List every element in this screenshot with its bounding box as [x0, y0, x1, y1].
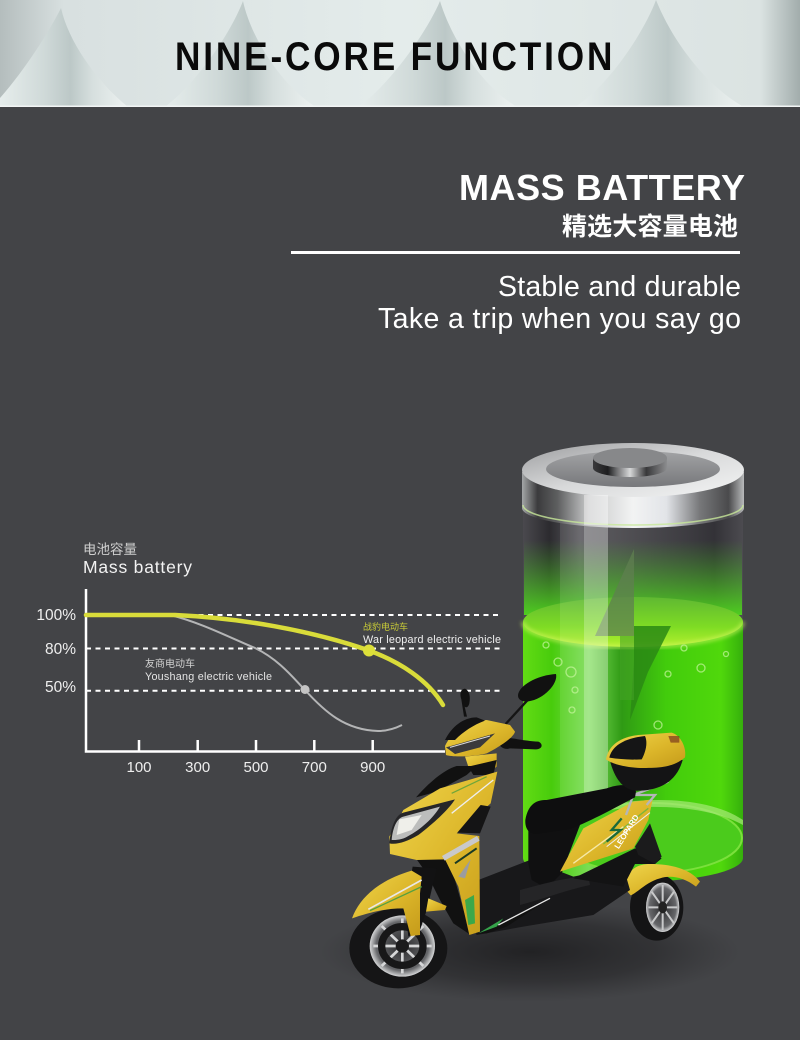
rear rack: [626, 782, 668, 815]
x axis labels: 900: [360, 759, 385, 776]
x axis labels: 100: [126, 759, 152, 776]
chart title: [83, 541, 192, 577]
tagline text: Take a trip when you say go: [378, 303, 741, 335]
header banner with tents: [0, 0, 800, 107]
rear lower black: [573, 848, 662, 887]
youshang label: [145, 657, 272, 683]
mirrors and stems: [460, 674, 556, 724]
competitor curve: [170, 615, 402, 731]
glass light ray: [584, 500, 608, 830]
liquid: [523, 622, 743, 882]
bubbles: [543, 642, 728, 729]
front fairing upper: [445, 720, 515, 756]
tagline text: [378, 271, 741, 335]
battery glass body: [523, 490, 743, 882]
bottom ellipse of liquid: [558, 803, 742, 873]
front fork: [405, 867, 437, 937]
battery illustration: [522, 443, 744, 882]
cap top: [522, 443, 744, 497]
cap inner recess: [546, 451, 720, 487]
scooter: [349, 674, 700, 988]
rear body panel: [560, 799, 653, 872]
tagline text: Stable and durable: [498, 271, 741, 303]
y axis labels: 50%: [45, 679, 76, 696]
war leopard label: 战豹电动车: [363, 621, 408, 632]
metal cap band: [522, 472, 744, 528]
chart title: 电池容量: [83, 541, 137, 557]
youshang label: Youshang electric vehicle: [145, 671, 272, 683]
black fork recess: [417, 857, 471, 935]
x axis labels: 700: [302, 759, 327, 776]
heading rule: [291, 251, 740, 254]
lightning bolt: [595, 549, 671, 720]
chassis and floorboard: [468, 860, 630, 935]
x axis labels: [126, 759, 385, 776]
front fender: [352, 871, 422, 936]
shield stripes: [443, 777, 493, 863]
rear fender: [623, 864, 700, 895]
war leopard curve: [86, 615, 443, 705]
youshang label: 友商电动车: [145, 657, 195, 670]
under-seat black body: [528, 825, 580, 888]
war leopard label: [363, 621, 501, 646]
x axis labels: 500: [243, 759, 269, 776]
top case: [606, 733, 685, 791]
rear wheel: [630, 874, 683, 941]
competitor marker: [300, 685, 310, 694]
front shield: [389, 772, 497, 935]
floor shadow: [320, 902, 740, 1002]
scooter: LEOPARD: [613, 813, 641, 850]
tent 2: [165, 1, 316, 107]
x axis labels: 300: [185, 759, 210, 776]
y axis labels: [36, 607, 76, 696]
steering column: [465, 753, 497, 772]
seat: [525, 785, 636, 834]
subheading chinese: 精选大容量电池: [562, 212, 738, 241]
axes: [86, 589, 445, 752]
headlight: [389, 799, 455, 844]
front wheel: [349, 908, 447, 988]
green glow above liquid: [524, 540, 742, 615]
war leopard label: War leopard electric vehicle: [363, 634, 501, 646]
tent 1: [0, 8, 128, 107]
terminal post: [593, 458, 667, 477]
shield upper black: [416, 766, 477, 797]
liquid surface: [523, 597, 743, 647]
y axis labels: 100%: [36, 607, 76, 624]
heading: mass battery: MASS BATTERY: [459, 167, 745, 208]
war leopard marker: [363, 644, 375, 656]
handlebar: [499, 738, 542, 749]
chart title: Mass battery: [83, 557, 192, 577]
neck black: [468, 760, 497, 775]
chart: battery capacity: [36, 541, 501, 776]
grid lines: [86, 615, 501, 691]
y axis labels: 80%: [45, 641, 76, 658]
title: NINE-CORE FUNCTION: [175, 34, 612, 78]
tent 4: [614, 0, 741, 106]
tent 3: [384, 2, 514, 106]
vertical light over cap: [584, 495, 608, 525]
